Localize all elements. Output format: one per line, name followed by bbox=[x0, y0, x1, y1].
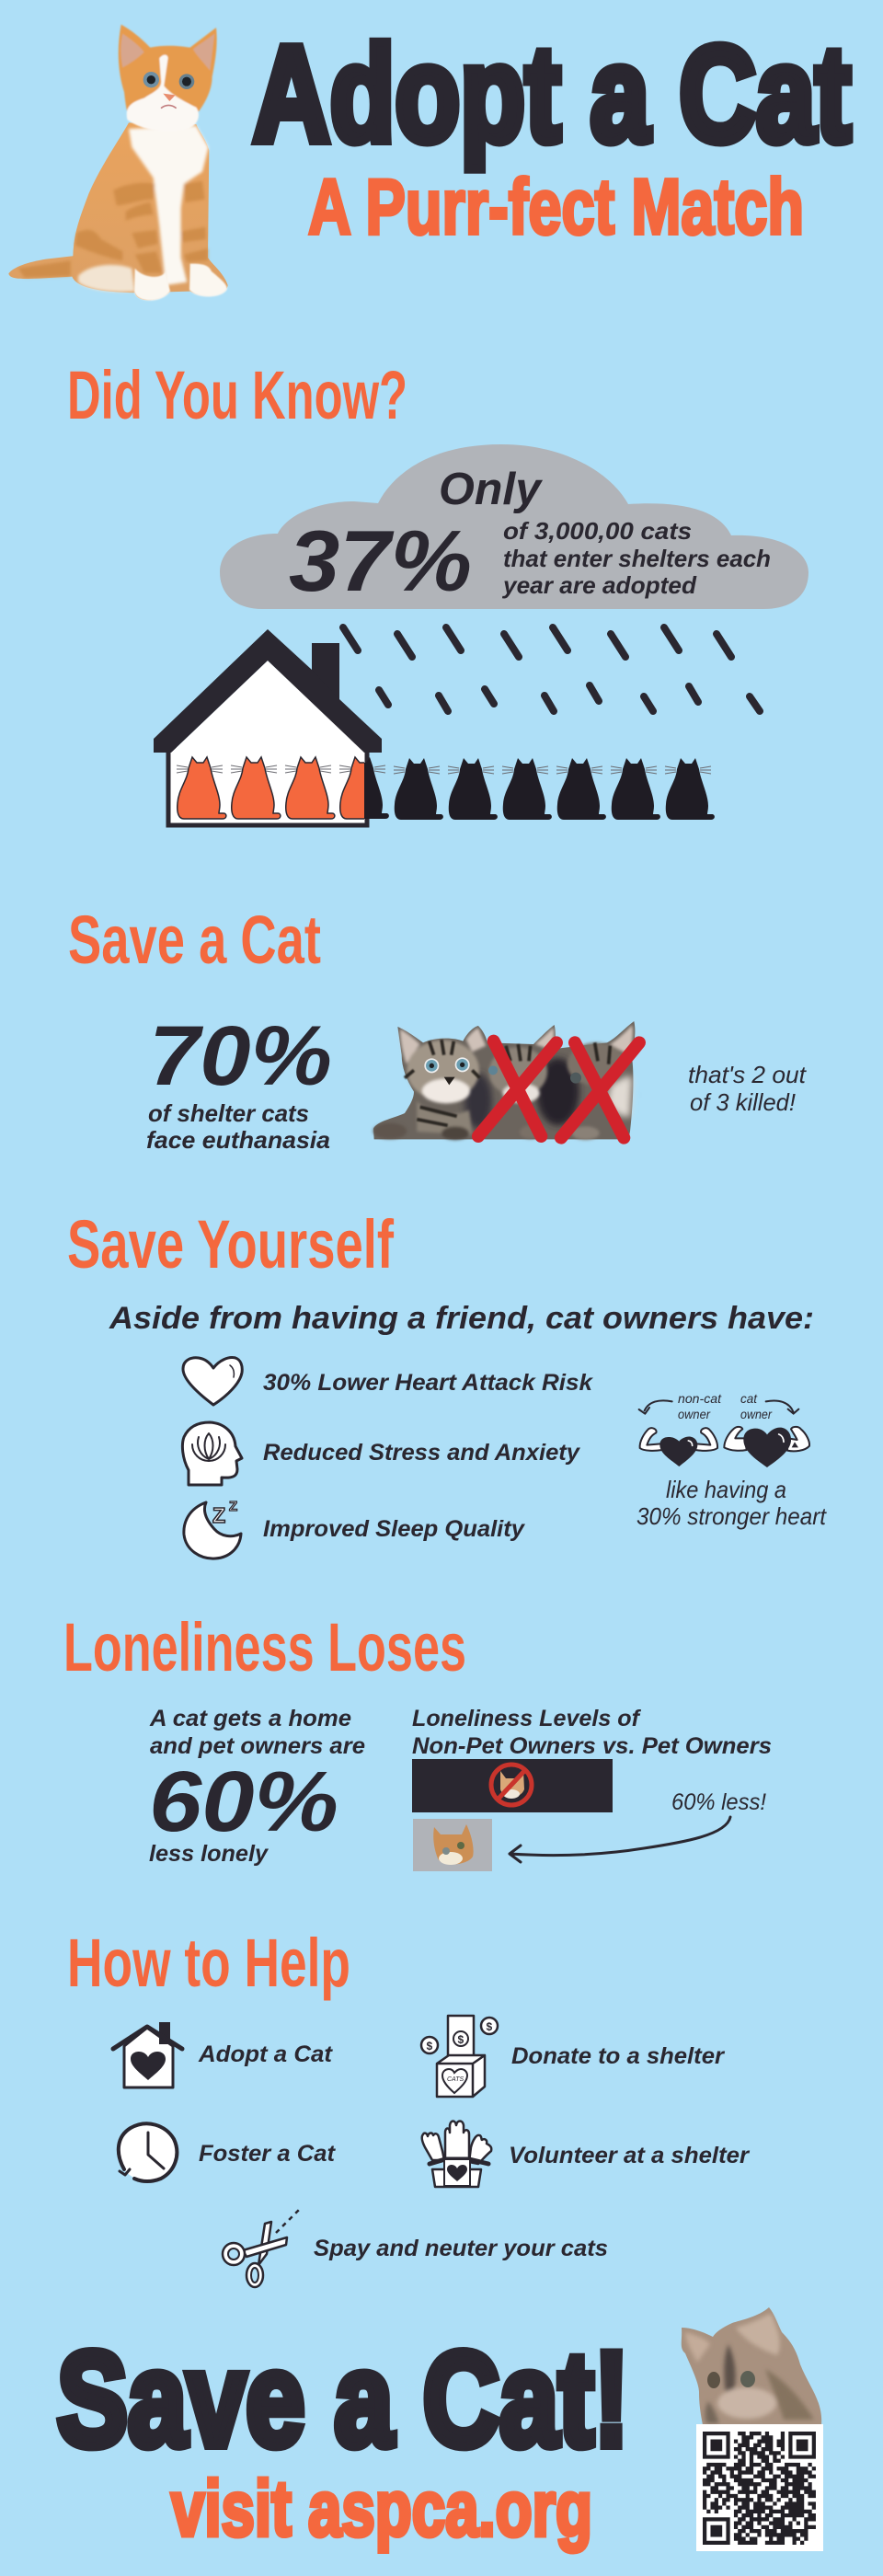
icon: moon with zzz bbox=[184, 1499, 241, 1558]
intro sentence: Aside from having a friend, cat owners have: bbox=[109, 1301, 814, 1336]
labels bbox=[678, 1391, 773, 1421]
lead text: A cat gets a home bbox=[149, 1706, 351, 1731]
icon: raised hands bbox=[422, 2122, 491, 2187]
footer bbox=[57, 2307, 823, 2553]
benefit: sleep: Improved Sleep Quality bbox=[263, 1516, 525, 1542]
arrows and flexing hearts bbox=[639, 1400, 809, 1467]
caption: 30% stronger heart bbox=[636, 1502, 828, 1530]
action: spay and neuter: Spay and neuter your cats bbox=[314, 2236, 608, 2261]
icon: heart bbox=[183, 1358, 242, 1405]
stat: 60 percent: 60% bbox=[149, 1754, 338, 1849]
rain bbox=[343, 627, 731, 657]
labels: non-cat bbox=[678, 1391, 722, 1406]
house bbox=[154, 629, 382, 825]
icon: donation box: $ bbox=[458, 2033, 464, 2046]
chart title bbox=[412, 1706, 772, 1759]
benefit: heart: 30% Lower Heart Attack Risk bbox=[263, 1370, 593, 1396]
icon: donation box: $ bbox=[486, 2020, 493, 2033]
link: visit aspca.org bbox=[171, 2466, 592, 2553]
icon: donation box: $ bbox=[427, 2040, 432, 2053]
benefit: stress: Reduced Stress and Anxiety bbox=[263, 1440, 580, 1466]
cats inside house bbox=[177, 757, 389, 819]
icon: house with heart bbox=[113, 2022, 182, 2087]
stat caption: of shelter cats bbox=[148, 1099, 309, 1127]
photo: fluffy kitten bbox=[682, 2307, 821, 2425]
heart comparison bbox=[636, 1391, 828, 1530]
photo: orange kitten bbox=[8, 25, 228, 301]
bar: non-pet owners bbox=[412, 1759, 613, 1812]
icon: clock bbox=[119, 2123, 178, 2181]
section: how to help bbox=[67, 1925, 750, 2287]
arrow bbox=[510, 1817, 730, 1862]
icon: donation box bbox=[421, 2016, 498, 2097]
action: volunteer: Volunteer at a shelter bbox=[509, 2143, 750, 2168]
heading: how to help: How to Help bbox=[67, 1925, 350, 2001]
stat caption: face euthanasia bbox=[146, 1126, 330, 1154]
section: did you know bbox=[67, 357, 808, 825]
lead text bbox=[149, 1706, 365, 1759]
labels: cat bbox=[740, 1391, 758, 1406]
heading: did you know: Did You Know? bbox=[67, 357, 407, 433]
call to action: Save a Cat! bbox=[57, 2324, 629, 2474]
header bbox=[8, 18, 851, 301]
labels: owner bbox=[678, 1407, 711, 1421]
photo: three kittens bbox=[373, 1021, 639, 1140]
stat caption bbox=[146, 1099, 330, 1154]
icon: moon with zzz: Z bbox=[229, 1499, 237, 1514]
section: loneliness loses bbox=[63, 1609, 772, 1871]
rain lower row bbox=[379, 685, 760, 711]
icon: donation box: CATS bbox=[447, 2076, 464, 2083]
lead text: and pet owners are bbox=[150, 1733, 365, 1759]
caption: like having a bbox=[666, 1476, 786, 1503]
labels: owner bbox=[740, 1407, 773, 1421]
handwritten note: that's 2 out bbox=[688, 1061, 808, 1088]
action: foster: Foster a Cat bbox=[199, 2141, 337, 2167]
stat: 37 percent: 37% bbox=[289, 512, 472, 609]
stat: 70 percent: 70% bbox=[149, 1009, 332, 1103]
chart title: Loneliness Levels of bbox=[412, 1706, 642, 1731]
cloud text: description: that enter shelters each bbox=[503, 545, 771, 572]
section: save a cat bbox=[68, 902, 808, 1154]
cloud text: only: Only bbox=[439, 465, 544, 514]
cloud text: description: of 3,000,00 cats bbox=[503, 517, 692, 545]
caption bbox=[636, 1476, 828, 1530]
heading: save yourself: Save Yourself bbox=[67, 1206, 394, 1282]
action: adopt: Adopt a Cat bbox=[198, 2041, 334, 2067]
note: 60 percent less: 60% less! bbox=[671, 1789, 766, 1815]
QR code bbox=[696, 2424, 823, 2551]
icon: head with lotus bbox=[182, 1422, 242, 1485]
cats outside house bbox=[340, 757, 715, 820]
action: donate: Donate to a shelter bbox=[511, 2043, 725, 2069]
cloud text: description: year are adopted bbox=[501, 571, 697, 599]
stat caption: less lonely bbox=[149, 1841, 269, 1867]
heading: save a cat: Save a Cat bbox=[68, 902, 321, 978]
heading: loneliness loses: Loneliness Loses bbox=[63, 1609, 466, 1685]
handwritten note bbox=[688, 1061, 808, 1116]
bar: pet owners bbox=[413, 1819, 492, 1871]
cloud bbox=[220, 444, 808, 609]
handwritten note: of 3 killed! bbox=[690, 1088, 796, 1116]
chart title: Non-Pet Owners vs. Pet Owners bbox=[412, 1733, 772, 1759]
section: save yourself bbox=[67, 1206, 828, 1558]
red crosses bbox=[478, 1041, 639, 1138]
cloud text: description bbox=[501, 517, 771, 599]
icon: moon with zzz: Z bbox=[212, 1503, 225, 1527]
icon: scissors bbox=[223, 2207, 302, 2287]
